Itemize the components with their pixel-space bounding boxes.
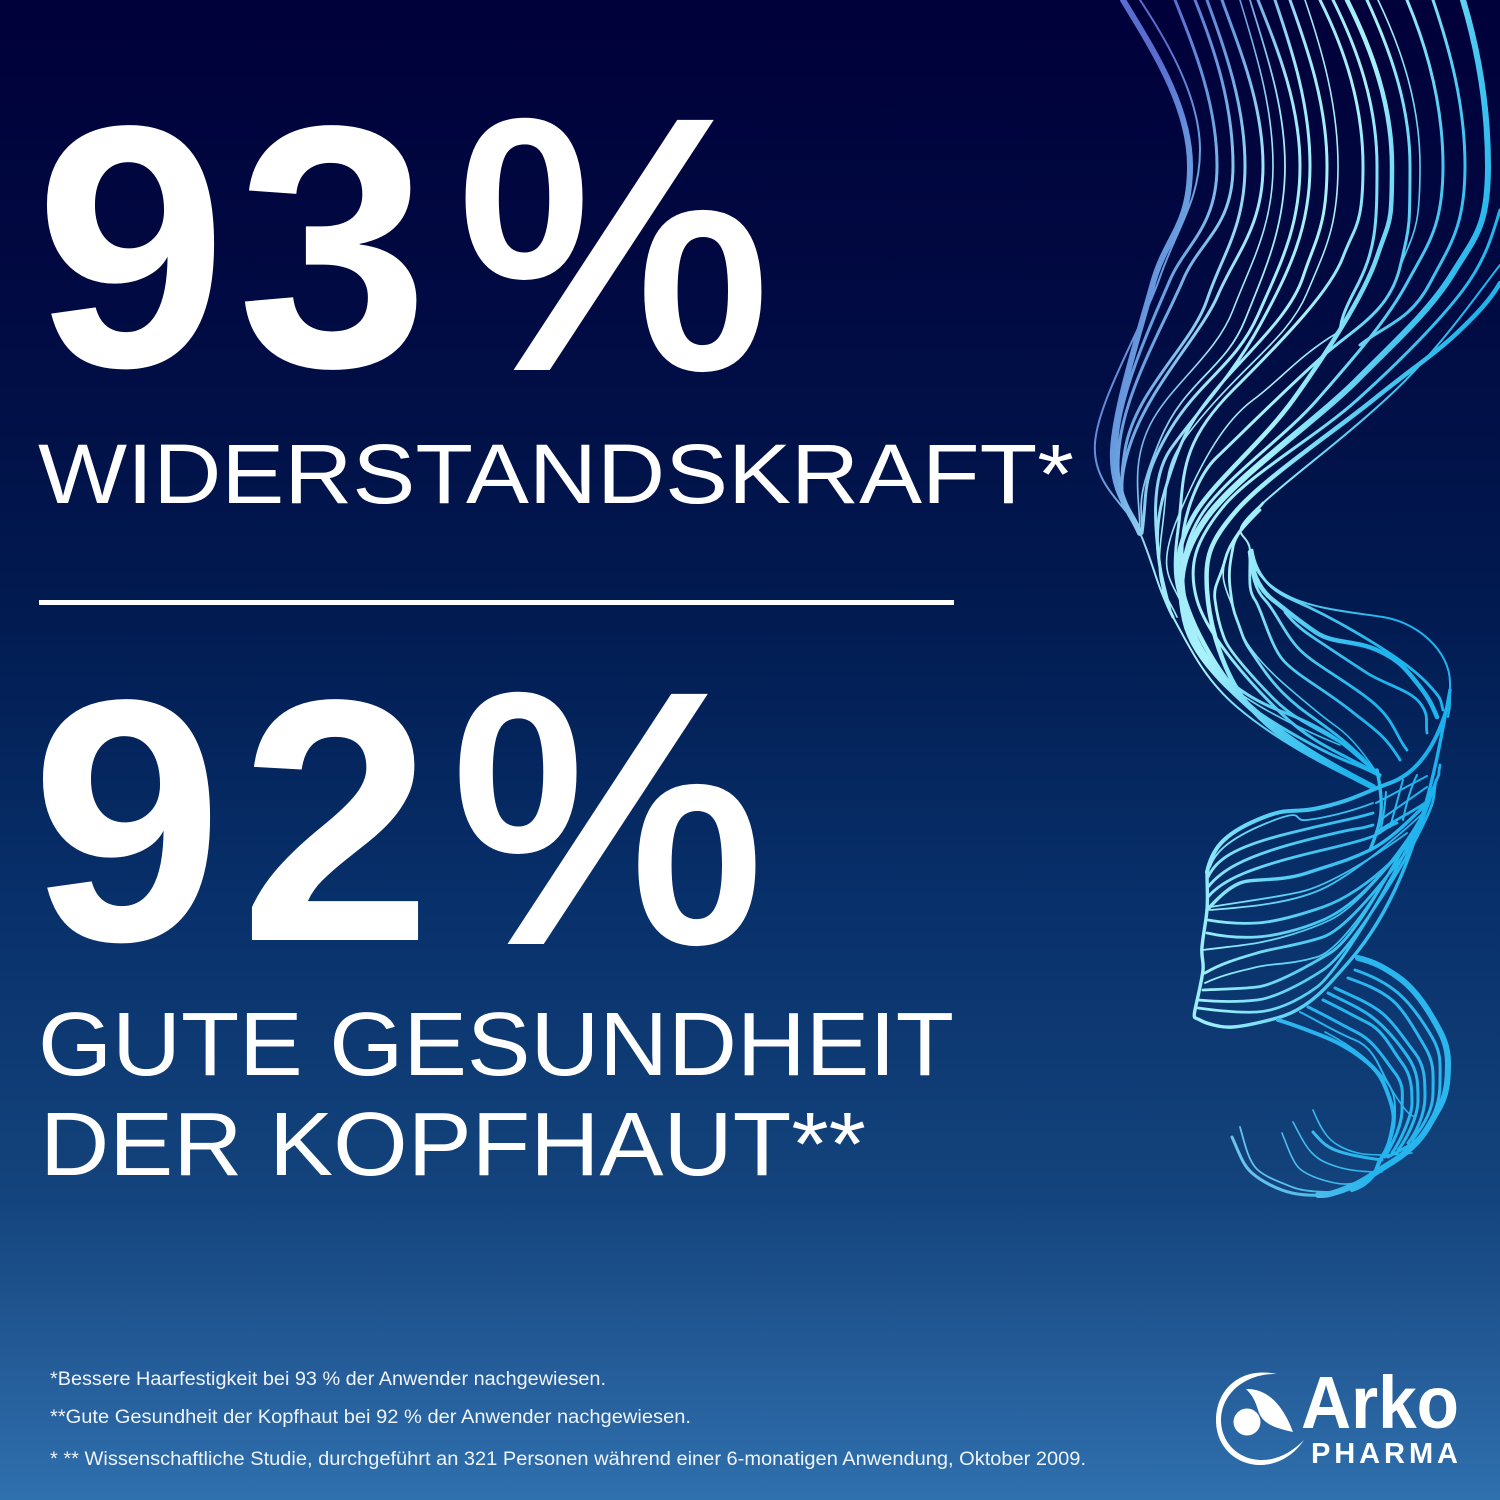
label: Gute Gesundheit der Kopfhaut: DER KOPFHAUT** [40,1095,866,1195]
stat: 93%: 93 [35,55,429,440]
divider rule [39,600,954,605]
twisted ribbon leaf [1194,690,1450,1027]
stat: 92%: 92 [31,629,432,1014]
icon: crescent, dot and leaf [1216,1372,1304,1465]
stat: 92%: % [451,621,764,1015]
label: Gute Gesundheit der Kopfhaut: GUTE GESUNDHEIT [38,995,954,1095]
footnotes: **Gute Gesundheit der Kopfhaut bei 92 % der Anwender nachgewiesen. [50,1407,691,1428]
upper strand bundle [1095,0,1500,787]
wordmark: Arko [1301,1361,1459,1444]
logo: Arko Pharma [1216,1361,1459,1470]
stat: 93%: % [457,47,770,441]
lower curl [1232,958,1448,1195]
footnotes: *Bessere Haarfestigkeit bei 93 % der Anwender nachgewiesen. [50,1369,606,1390]
label: Widerstandskraft: WIDERSTANDSKRAFT* [38,427,1074,521]
illustration: hair strand [1095,0,1500,1195]
footnotes: * ** Wissenschaftliche Studie, durchgeführt an 321 Personen während einer 6-monatigen Anwendung, Oktober 2009. [50,1449,1086,1470]
footnotes [50,1369,1086,1470]
label: Gute Gesundheit der Kopfhaut [38,995,954,1195]
wordmark: pharma: PHARMA [1311,1438,1458,1470]
